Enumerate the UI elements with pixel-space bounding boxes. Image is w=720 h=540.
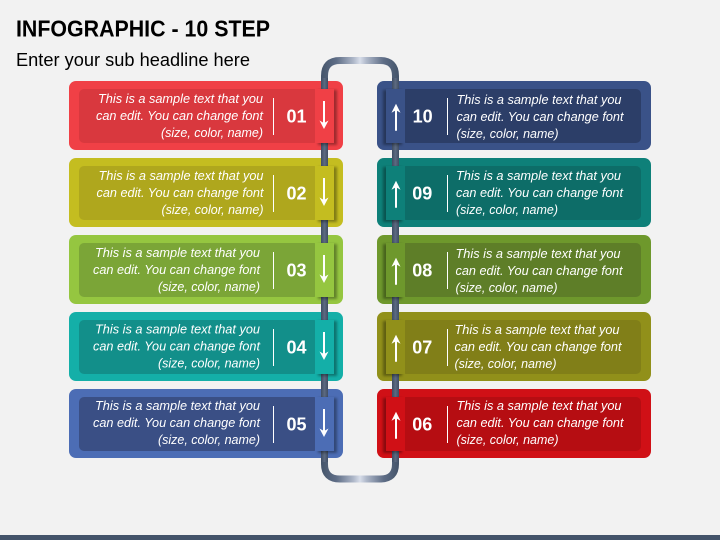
step 10 card	[377, 81, 651, 150]
step 09 card	[377, 158, 651, 227]
step 03 text: can edit. You can change font	[93, 263, 261, 277]
step 02 text: (size, color, name)	[162, 203, 264, 217]
step 09 text: can edit. You can change font	[456, 186, 624, 200]
step 03 number: 03	[286, 261, 307, 281]
step 08 text: (size, color, name)	[456, 281, 558, 295]
step 02 text: This is a sample text that you	[98, 169, 264, 183]
step 02 card	[69, 158, 343, 227]
step 08 text: This is a sample text that you	[456, 247, 620, 261]
step 02 number: 02	[286, 184, 307, 204]
step 07 text	[454, 323, 622, 371]
step 03 card	[69, 235, 343, 304]
step 03 text: (size, color, name)	[158, 280, 260, 294]
step 10 text	[456, 93, 624, 141]
step 09 arrow	[392, 181, 400, 208]
step 03 text: This is a sample text that you	[95, 246, 260, 260]
step 07 text: can edit. You can change font	[454, 340, 622, 354]
step 02 arrow	[320, 178, 328, 206]
step 05 text	[93, 399, 261, 447]
step 05 arrow	[320, 409, 328, 437]
step 04 card	[69, 312, 343, 381]
step 04 text: This is a sample text that you	[95, 322, 260, 336]
step 10 text: This is a sample text that you	[456, 93, 622, 107]
step 07 number: 07	[412, 338, 432, 358]
step 04 number: 04	[286, 338, 307, 358]
step 05 text: (size, color, name)	[158, 433, 260, 447]
step 08 text	[456, 247, 623, 295]
step 01 text	[96, 92, 264, 140]
step 06 text: This is a sample text that you	[456, 399, 622, 413]
connector pipe	[321, 60, 399, 479]
step 01 text: can edit. You can change font	[96, 109, 264, 123]
step 05 text: can edit. You can change font	[93, 416, 261, 430]
step 10 text: can edit. You can change font	[456, 110, 624, 124]
step 04 text: (size, color, name)	[158, 356, 260, 370]
step 02 text	[96, 169, 264, 217]
step 04 text	[93, 322, 261, 370]
step 01 number: 01	[286, 107, 307, 127]
step 04 arrow	[320, 332, 328, 360]
step 08 text: can edit. You can change font	[456, 264, 623, 278]
step 10 arrow	[392, 104, 400, 131]
step 05 card	[69, 389, 343, 458]
step 05 text: This is a sample text that you	[95, 399, 260, 413]
step 06 text: (size, color, name)	[456, 433, 558, 447]
title: INFOGRAPHIC - 10 STEP	[16, 16, 270, 42]
step 07 card	[377, 312, 651, 381]
step 07 arrow	[392, 335, 400, 362]
step 06 arrow	[392, 412, 400, 439]
step 09 text: (size, color, name)	[456, 203, 558, 217]
step 07 text: This is a sample text that you	[454, 323, 620, 337]
sub headline: Enter your sub headline here	[16, 50, 250, 70]
step 09 number: 09	[412, 184, 432, 204]
step 08 card	[377, 235, 651, 304]
step 09 text: This is a sample text that you	[456, 169, 621, 183]
step 02 text: can edit. You can change font	[96, 186, 264, 200]
step 10 text: (size, color, name)	[456, 127, 558, 141]
step 03 text	[93, 246, 261, 294]
step 06 text	[456, 399, 624, 447]
step 01 text: (size, color, name)	[161, 126, 263, 140]
step 10 number: 10	[413, 107, 433, 127]
step 08 arrow	[392, 258, 400, 285]
step 05 number: 05	[286, 415, 307, 435]
step 01 text: This is a sample text that you	[98, 92, 263, 106]
step 06 number: 06	[412, 415, 432, 435]
step 01 card	[69, 81, 343, 150]
bottom bar	[0, 535, 720, 540]
step 06 card	[377, 389, 651, 458]
step 06 text: can edit. You can change font	[456, 416, 624, 430]
step 01 arrow	[320, 101, 328, 129]
step 09 text	[456, 169, 624, 217]
step 03 arrow	[320, 255, 328, 283]
step 04 text: can edit. You can change font	[93, 340, 261, 354]
step 08 number: 08	[412, 261, 432, 281]
step 07 text: (size, color, name)	[454, 357, 556, 371]
